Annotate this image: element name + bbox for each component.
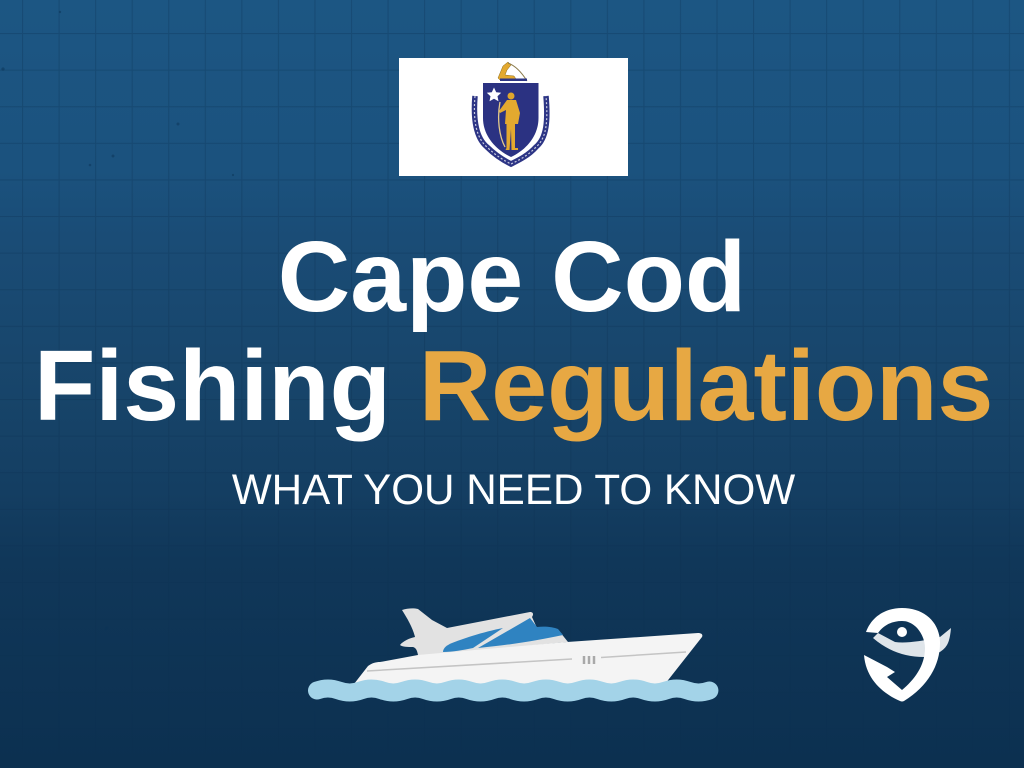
hull: [354, 633, 702, 684]
hull stripe: [367, 652, 686, 671]
icon: white star: [487, 88, 501, 101]
title line: Cape Cod: Cape Cod: [278, 221, 746, 333]
waves: [317, 688, 709, 692]
logo body: [864, 608, 940, 702]
flag of Massachusetts: [399, 58, 628, 176]
logo: fish hook: [864, 608, 951, 702]
title line: Fishing Regulations: Fishing Regulations: [34, 330, 993, 442]
icon: native figure with bow: [499, 92, 520, 150]
cabin and fin: [400, 608, 568, 656]
icon: shield: [483, 83, 538, 157]
logo eye: [897, 627, 907, 637]
icon: crest arm and sword: [498, 62, 527, 81]
title: [34, 221, 993, 442]
icon: motto ribbon: [474, 96, 547, 164]
windshield: [478, 618, 563, 648]
logo tail and band: [873, 628, 951, 657]
subtitle: WHAT YOU NEED TO KNOW: [232, 466, 795, 513]
vents: [584, 656, 594, 664]
illustration: yacht on waves: [317, 608, 709, 692]
side window: [443, 628, 503, 652]
